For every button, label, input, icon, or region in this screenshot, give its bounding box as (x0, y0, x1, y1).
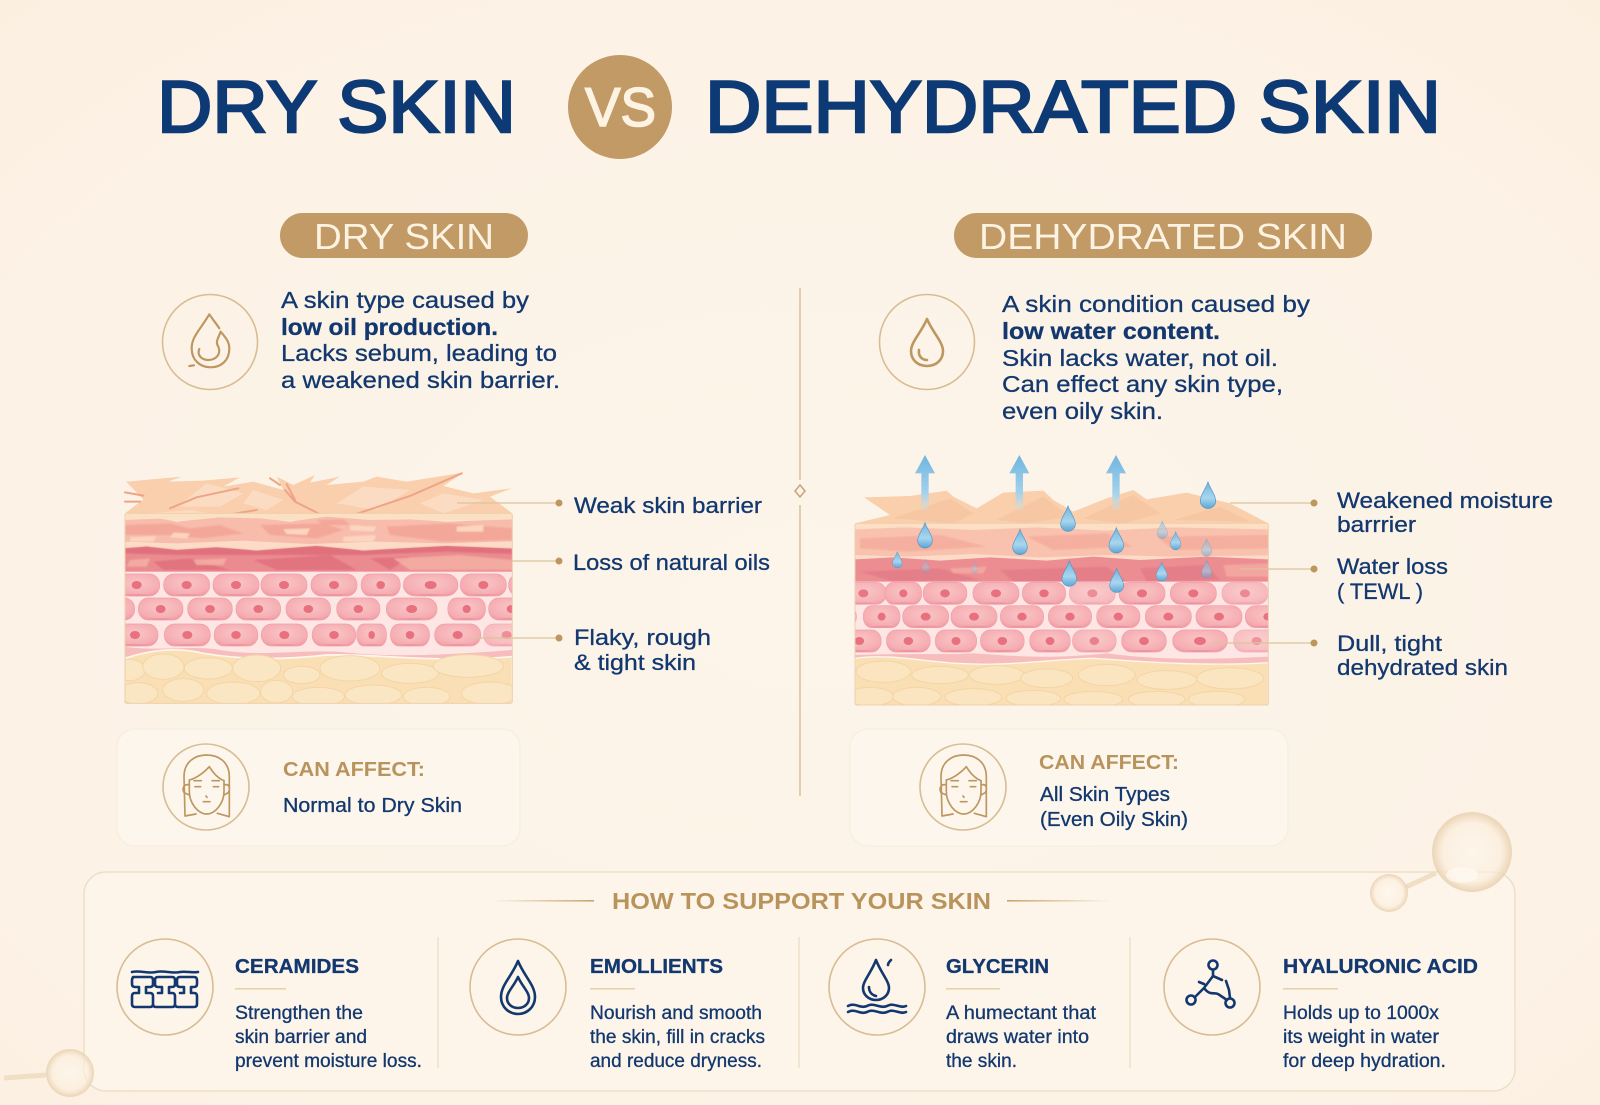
text: dry skin description: a weakened skin barrier. (281, 367, 560, 393)
skin diagram: dry skin (124, 472, 513, 704)
item: hyaluronic acid: for deep hydration. (1283, 1051, 1446, 1072)
panel: can affect, dehydrated skin: (Even Oily Skin) (1040, 808, 1188, 831)
skin labels: dehydrated skin: Water loss (1337, 554, 1448, 579)
panel: can affect, dehydrated skin: CAN AFFECT: (1039, 751, 1179, 774)
skin labels: dry skin: Loss of natural oils (573, 550, 770, 575)
text: dry skin description: low oil production. (281, 314, 498, 340)
skin labels: dry skin (457, 493, 770, 675)
item: glycerin: draws water into (946, 1027, 1089, 1048)
skin labels: dehydrated skin: dehydrated skin (1337, 655, 1508, 680)
text: dehydrated skin description: A skin condition caused by (1002, 291, 1310, 317)
badge: vs: VS (585, 76, 656, 138)
title (157, 55, 1441, 159)
text: dry skin description: Lacks sebum, leading to (281, 340, 557, 366)
item: glycerin (829, 939, 1097, 1072)
item: hyaluronic acid: HYALURONIC ACID (1283, 955, 1478, 978)
item: emollients: Nourish and smooth (590, 1003, 762, 1024)
center divider (795, 288, 805, 796)
skin labels: dehydrated skin: ( TEWL ) (1337, 579, 1423, 604)
skin labels: dehydrated skin (1210, 488, 1553, 680)
item: hyaluronic acid (1164, 939, 1478, 1072)
item: emollients: and reduce dryness. (590, 1051, 762, 1072)
icon: face (920, 744, 1006, 830)
icon: face (163, 744, 249, 830)
panel: can affect, dry skin (117, 729, 520, 846)
item: hyaluronic acid: Holds up to 1000x (1283, 1003, 1439, 1024)
text: dry skin description: A skin type caused by (281, 287, 529, 313)
text: dry skin description (281, 287, 560, 393)
item: glycerin: A humectant that (946, 1003, 1097, 1024)
item: ceramides (117, 939, 422, 1072)
item: emollients: the skin, fill in cracks (590, 1027, 765, 1048)
skin labels: dry skin: Weak skin barrier (574, 493, 762, 518)
text: dehydrated skin description (1002, 291, 1310, 424)
skin diagram: dehydrated skin (810, 455, 1291, 707)
heading: how to support your skin: HOW TO SUPPORT YOUR SKIN (612, 888, 991, 914)
item: ceramides: skin barrier and (235, 1027, 367, 1048)
decorative molecule: top right (1370, 812, 1512, 912)
panel: can affect, dehydrated skin (850, 729, 1288, 846)
icon: double drop (470, 939, 566, 1035)
icon: molecule (1164, 939, 1260, 1035)
item: glycerin: GLYCERIN (946, 955, 1049, 978)
heading: dehydrated skin: DEHYDRATED SKIN (705, 67, 1441, 148)
skin labels: dehydrated skin: Weakened moisture (1337, 488, 1553, 513)
skin labels: dehydrated skin: barrrier (1337, 512, 1416, 537)
heading: dry skin: DRY SKIN (157, 67, 516, 148)
water droplets (893, 482, 1216, 592)
arrows: water evaporating (915, 455, 1126, 510)
panel: can affect, dry skin: Normal to Dry Skin (283, 794, 462, 817)
pill: dry skin: DRY SKIN (314, 216, 494, 257)
icon: water drop (880, 294, 974, 390)
item: emollients: EMOLLIENTS (590, 955, 723, 978)
item: ceramides: Strengthen the (235, 1003, 363, 1024)
item: hyaluronic acid: its weight in water (1283, 1027, 1440, 1048)
panel: can affect, dry skin: CAN AFFECT: (283, 758, 425, 781)
skin labels: dehydrated skin: Dull, tight (1337, 631, 1442, 656)
item: ceramides: prevent moisture loss. (235, 1051, 422, 1072)
item: glycerin: the skin. (946, 1051, 1017, 1072)
skin labels: dry skin: & tight skin (574, 650, 696, 675)
pill: dehydrated skin: DEHYDRATED SKIN (979, 216, 1347, 257)
text: dehydrated skin description: low water content. (1002, 318, 1220, 344)
badge: vs (568, 55, 672, 159)
item: emollients (470, 939, 765, 1072)
text: dehydrated skin description: even oily skin. (1002, 398, 1163, 424)
pill: dry skin (280, 213, 528, 258)
icon: drop over waves (829, 939, 925, 1035)
panel: how to support your skin (84, 872, 1515, 1091)
icon: oil drop (162, 294, 258, 390)
panel: can affect, dehydrated skin: All Skin Types (1040, 783, 1170, 806)
text: dehydrated skin description: Can effect any skin type, (1002, 371, 1283, 397)
text: dehydrated skin description: Skin lacks water, not oil. (1002, 345, 1278, 371)
decorative molecule: bottom left (4, 1049, 94, 1097)
skin labels: dry skin: Flaky, rough (574, 625, 711, 650)
item: ceramides: CERAMIDES (235, 955, 359, 978)
icon: skin barrier bricks (117, 939, 213, 1035)
